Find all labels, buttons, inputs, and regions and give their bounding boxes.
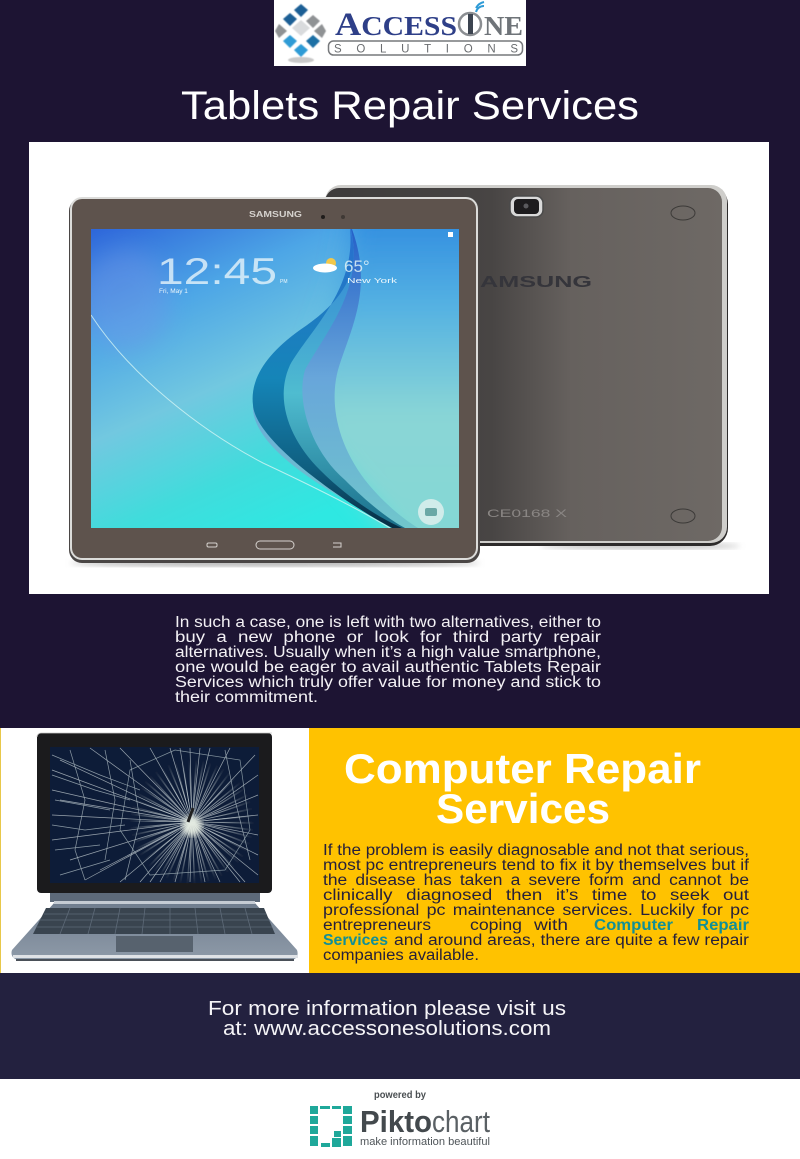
body paragraph: clinically diagnosed then it’s time to seek out [323, 887, 750, 904]
intro paragraph: In such a case, one is left with two alternatives, either to [175, 614, 601, 631]
body paragraph: Computer [594, 917, 673, 934]
status icons [448, 232, 453, 237]
title: Tablets Repair Services [181, 84, 639, 128]
contact text: at: www.accessonesolutions.com [223, 1018, 551, 1040]
weather widget: 65° [344, 257, 370, 276]
heading: computer repair services [344, 745, 701, 832]
icon: Piktochart logo [310, 1106, 352, 1147]
screen: Fri, May 1 [159, 288, 188, 295]
logo O with number one [459, 13, 481, 35]
logo: Access One Solutions [274, 0, 526, 66]
intro paragraph [175, 614, 601, 706]
photo: Samsung tablets [29, 142, 769, 594]
regulatory marks: CE0168 X [487, 508, 568, 520]
laptop base [11, 902, 298, 960]
back camera [510, 196, 543, 217]
intro paragraph: Services which truly offer value for money and stick to [175, 674, 601, 691]
footer: Piktochart branding: chart [432, 1104, 490, 1139]
logo tagline pill: SOLUTIONS [334, 44, 518, 56]
panel: computer repair [0, 728, 800, 973]
front tablet [69, 197, 500, 563]
screen: PM [280, 279, 288, 285]
body paragraph: most pc entrepreneurs tend to fix it by themselves but if [323, 857, 750, 874]
heading: computer repair services: Computer Repair [344, 745, 701, 792]
hinge [50, 892, 260, 902]
body paragraph: entrepreneurs [323, 917, 431, 934]
icon: logo diamond mark [275, 4, 326, 63]
camera shortcut [418, 499, 444, 525]
body paragraph: professional pc maintenance services. Luckily for pc [323, 902, 749, 919]
hardware buttons [207, 541, 341, 549]
weather widget: New York [347, 276, 397, 285]
contact text: For more information please visit us [208, 998, 566, 1020]
body paragraph [323, 842, 750, 964]
screen [91, 229, 459, 528]
body paragraph: coping [470, 917, 522, 934]
back brand text: AMSUNG [480, 274, 592, 291]
intro paragraph: buy a new phone or look for third party repair [175, 629, 601, 646]
touchpad [116, 936, 193, 952]
logo wordmark: ACCESS [335, 7, 457, 43]
swoosh [91, 229, 418, 528]
logo wordmark end: NE [484, 11, 523, 41]
intro paragraph: their commitment. [175, 689, 318, 706]
laptop lid [37, 733, 272, 893]
contact text [208, 998, 566, 1040]
weather widget [313, 258, 397, 283]
back tablet [325, 185, 740, 549]
intro paragraph: one would be eager to avail authentic Tablets Repair [175, 659, 601, 676]
footer: Piktochart branding [0, 1079, 800, 1159]
panel: contact band [0, 973, 800, 1079]
intro paragraph: alternatives. Usually when it’s a high value smartphone, [175, 644, 601, 661]
tablet shadow [70, 560, 480, 566]
heading: computer repair services: Services [436, 785, 610, 832]
keyboard [33, 908, 275, 934]
lock screen clock: 12:45 [157, 251, 277, 292]
cracked screen [50, 747, 259, 883]
Piktochart wordmark: Pikto [360, 1104, 432, 1139]
front brand text: SAMSUNG [249, 210, 302, 219]
tagline: make information beautiful [360, 1136, 490, 1148]
photo: cracked laptop [0, 728, 309, 973]
body paragraph: the disease has taken a severe form and cannot be [323, 872, 749, 889]
body paragraph: with [533, 917, 568, 934]
powered by: powered by [374, 1090, 426, 1101]
body paragraph: If the problem is easily diagnosable and not that serious, [323, 842, 749, 859]
body paragraph: and around areas, there are quite a few repair [394, 932, 749, 949]
body paragraph: Services [323, 932, 388, 949]
body paragraph: companies available. [323, 947, 479, 964]
body paragraph: Repair [697, 917, 749, 934]
icon: wifi signal [476, 2, 484, 12]
